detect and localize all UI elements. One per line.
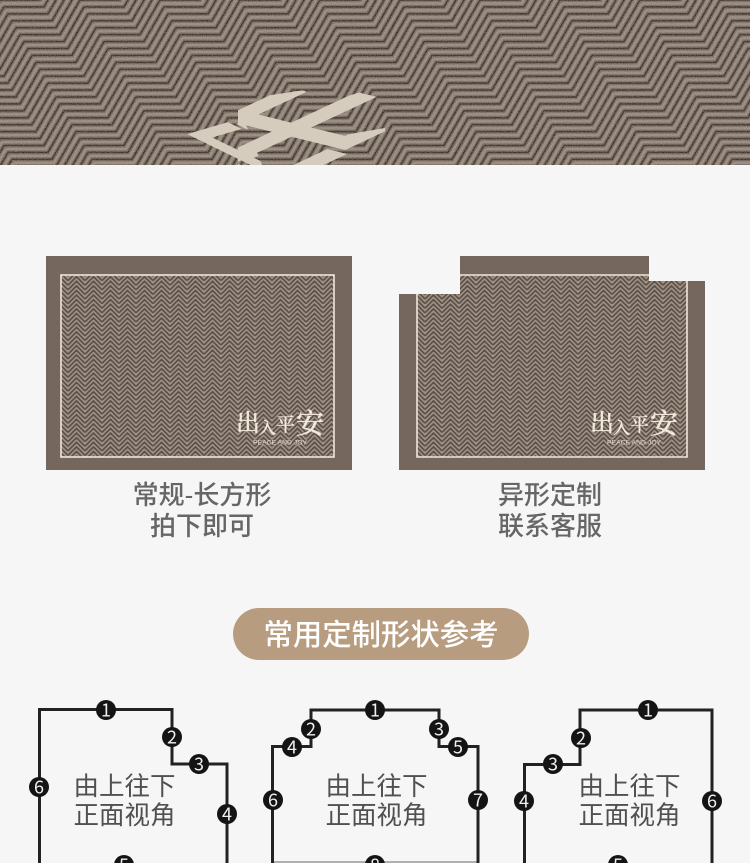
hero: woven herringbone mat close-up <box>0 0 750 165</box>
diagram 1: notch top right <box>29 696 237 863</box>
mat brand mark: 入 <box>259 419 276 438</box>
diagram 2: notches on both top corners: 6 <box>268 786 278 812</box>
mat brand mark <box>236 408 325 446</box>
mat herringbone field <box>417 275 687 457</box>
mat brand mark: PEACE AND JOY <box>607 440 661 446</box>
caption: custom shape <box>498 480 602 541</box>
mat brand mark: PEACE AND JOY <box>253 440 307 446</box>
mat brand mark: 平 <box>630 414 649 436</box>
diagram 1: notch top right: 1 <box>101 696 111 722</box>
diagram 1: notch top right: 6 <box>34 774 44 800</box>
diagram 3: notch top left <box>514 696 722 863</box>
diagram 1: notch top right: 4 <box>222 800 232 826</box>
diagram 2: notches on both top corners <box>263 696 488 863</box>
diagram 2: notches on both top corners: 2 <box>306 716 316 742</box>
panel: standard rectangular mat <box>46 256 352 470</box>
shape diagrams <box>29 696 722 863</box>
diagram 3: notch top left: 由上往下 <box>578 773 681 801</box>
diagram 2: notches on both top corners: 1 <box>370 696 380 722</box>
heading pill: common custom shapes <box>233 608 529 660</box>
panel: custom shaped mat <box>399 256 705 470</box>
mat brand mark: 平 <box>276 414 295 436</box>
mat brand mark: 出 <box>590 410 614 437</box>
diagram 3: notch top left: 4 <box>519 788 529 814</box>
diagram 3: notch top left: 3 <box>548 750 558 776</box>
mat herringbone field with cream line <box>61 275 334 457</box>
caption: standard rectangle: 拍下即可 <box>150 511 254 541</box>
diagram 1: notch top right: 由上往下 <box>74 773 176 801</box>
caption: custom shape: 联系客服 <box>498 511 602 541</box>
diagram 1: notch top right: 正面视角 <box>74 802 176 830</box>
diagram 2: notches on both top corners: 由上往下 <box>326 773 428 801</box>
caption: custom shape: 异形定制 <box>498 480 602 510</box>
caption: standard rectangle: 常规-长方形 <box>133 480 271 510</box>
caption: standard rectangle <box>133 480 271 541</box>
diagram 2: notches on both top corners: 7 <box>473 786 483 812</box>
diagram 2: notches on both top corners: 4 <box>287 734 297 760</box>
cream line <box>417 275 687 457</box>
mat brand mark: 出 <box>236 410 260 437</box>
diagram 2: notches on both top corners: 3 <box>434 716 444 742</box>
diagram 3: notch top left: 1 <box>643 696 653 722</box>
mat border shape <box>399 256 705 470</box>
diagram 2: notches on both top corners: 正面视角 <box>326 802 428 830</box>
mat brand mark: 安 <box>650 408 679 440</box>
diagram 1: notch top right: 3 <box>194 750 204 776</box>
mat brand mark <box>590 408 679 446</box>
diagram 1: notch top right: 2 <box>167 724 177 750</box>
diagram 2: notches on both top corners: 5 <box>453 734 463 760</box>
mat brand mark: 入 <box>613 419 630 438</box>
mat border <box>46 256 352 470</box>
heading pill: common custom shapes: 常用定制形状参考 <box>263 619 499 652</box>
mat brand mark: 安 <box>296 408 325 440</box>
diagram 3: notch top left: 6 <box>707 788 717 814</box>
diagram 3: notch top left: 正面视角 <box>578 802 681 830</box>
diagram 3: notch top left: 2 <box>576 724 586 750</box>
